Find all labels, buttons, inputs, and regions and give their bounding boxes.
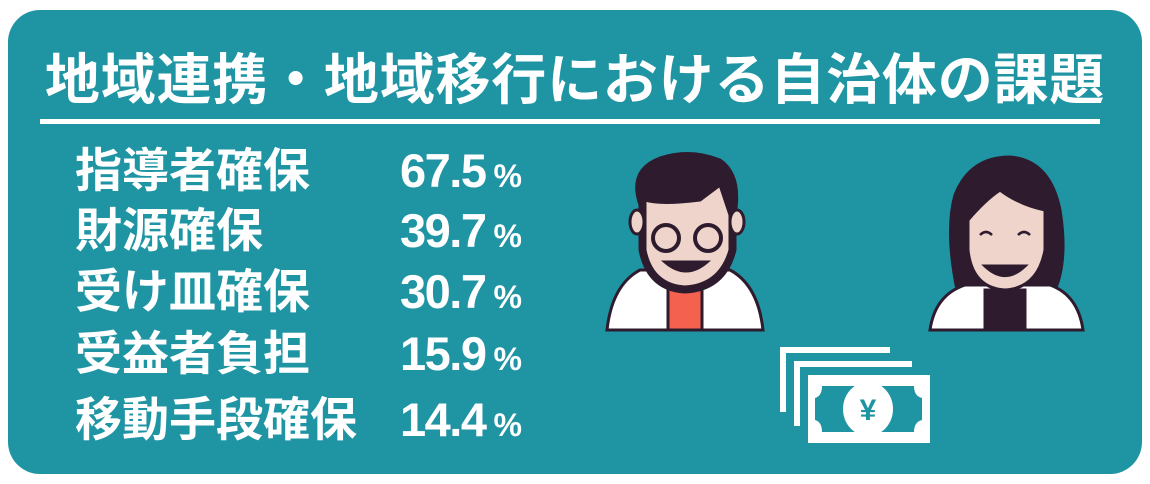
icon: money xyxy=(780,347,930,443)
icon: money: ¥ xyxy=(860,394,877,427)
row: 財源確保: 39.7% xyxy=(400,204,522,257)
title: 地域連携・地域移行における自治体の課題 xyxy=(45,49,1105,111)
row: 移動手段確保: 移動手段確保 xyxy=(75,393,357,446)
row: 受益者負担: 受益者負担 xyxy=(75,327,310,380)
row: 受け皿確保: 30.7% xyxy=(400,265,522,318)
icon: woman xyxy=(930,157,1083,330)
row: 指導者確保: 67.5% xyxy=(400,144,522,197)
row: 受益者負担: 15.9% xyxy=(400,327,522,380)
row: 受け皿確保 xyxy=(75,265,522,318)
row: 財源確保 xyxy=(75,204,522,257)
row: 指導者確保: 指導者確保 xyxy=(75,144,310,197)
row: 受け皿確保: 受け皿確保 xyxy=(75,265,310,318)
row: 移動手段確保: 14.4% xyxy=(400,393,522,446)
icon: man xyxy=(607,153,763,330)
row: 受益者負担 xyxy=(75,327,522,380)
row: 指導者確保 xyxy=(75,144,522,197)
row: 移動手段確保 xyxy=(75,393,522,446)
row: 財源確保: 財源確保 xyxy=(75,204,263,257)
